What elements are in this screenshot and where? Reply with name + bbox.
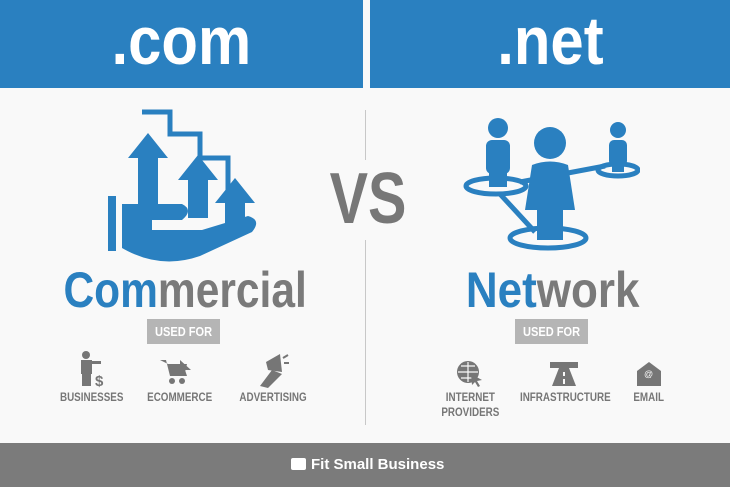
badge: used for right (515, 319, 588, 344)
header: .net (370, 0, 730, 88)
icon: ecommerce (160, 360, 191, 384)
label: email: EMAIL (634, 390, 664, 404)
badge: used for right: USED FOR (523, 324, 580, 339)
icon: advertising (260, 354, 289, 388)
icon: infrastructure (550, 362, 578, 386)
badge: used for left: USED FOR (155, 324, 212, 339)
label: internet providers: INTERNET (445, 390, 495, 404)
header: .com (0, 0, 363, 88)
VS: VS (330, 159, 406, 239)
badge: used for left (147, 319, 220, 344)
label: ecommerce: ECOMMERCE (147, 390, 213, 404)
heading: Network: Network (466, 262, 639, 318)
center divider (365, 110, 366, 160)
header: .net: .net (497, 3, 603, 79)
label: businesses: BUSINESSES (60, 390, 124, 404)
label: internet providers: PROVIDERS (441, 405, 499, 419)
icon: hand with arrows (108, 110, 256, 262)
label: advertising: ADVERTISING (239, 390, 307, 404)
footer (0, 443, 730, 487)
footer logo: Fit Small Business (311, 456, 444, 473)
header: .com: .com (112, 3, 251, 79)
icon: email: @ (644, 369, 653, 379)
icon: businesses (81, 351, 104, 388)
icon: network people (464, 118, 640, 250)
label: infrastructure: INFRASTRUCTURE (520, 390, 611, 404)
heading: Commercial: Commercial (63, 262, 307, 318)
icon: email (637, 362, 661, 386)
icon: globe (457, 361, 482, 387)
label: internet providers (441, 390, 499, 419)
